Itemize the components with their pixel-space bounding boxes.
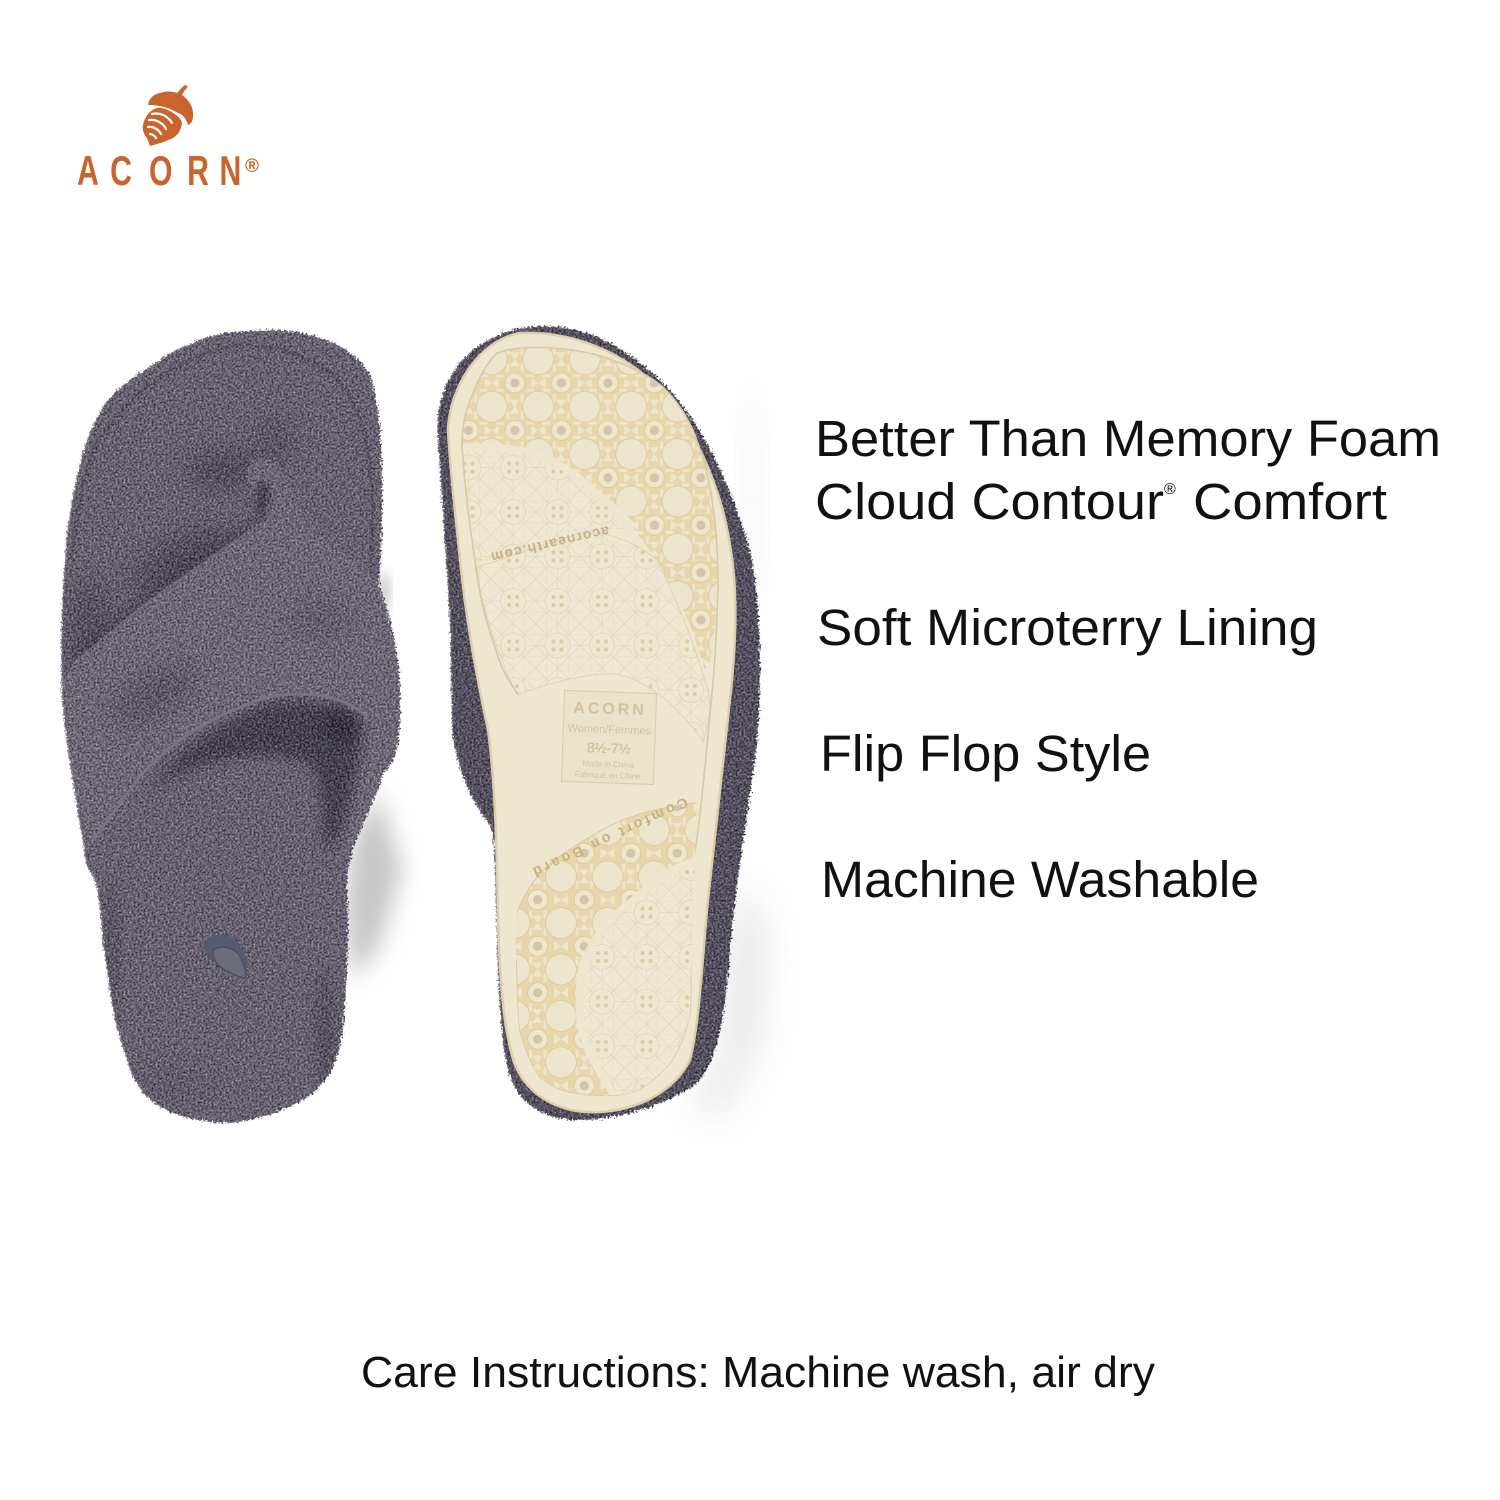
registered mark: ®: [245, 156, 259, 177]
toe tread: circles: [463, 348, 718, 670]
heel contour edge: [518, 803, 697, 910]
icon: acorn: [143, 85, 193, 146]
care instructions: Care Instructions: Machine wash, air dry: [361, 1348, 1155, 1397]
label gender: Women/Femmes: [567, 723, 652, 737]
label brand: ACORN: [573, 700, 647, 719]
slogan text on sole: Comfort on Board: [527, 793, 690, 881]
strap upper seam: [73, 522, 263, 663]
feature: cloud contour: ®: [1164, 481, 1176, 498]
feature: microterry: Soft Microterry Lining: [817, 599, 1318, 656]
feature: washable: Machine Washable: [821, 851, 1259, 908]
label size: 8½-7½: [587, 739, 631, 757]
strap: [58, 458, 402, 853]
sole rim shading: [448, 333, 735, 1112]
feature: memory foam: Better Than Memory Foam: [815, 410, 1441, 467]
website text on sole: acornearth.com: [489, 523, 611, 566]
post crease: [256, 481, 270, 509]
sole band: [476, 528, 705, 678]
heel tread: fine panel: [579, 860, 700, 1100]
strap shading: [116, 608, 336, 724]
heel tread: circles: [510, 800, 700, 1100]
toe area shading: [68, 418, 293, 670]
slipper footbed and strap: [58, 330, 402, 1123]
feature list: [815, 410, 1441, 908]
wordmark: ACORN: [77, 147, 241, 194]
strap edge stitching: [93, 694, 367, 840]
shadow: slippers: [345, 390, 765, 1120]
feature: cloud contour: [815, 473, 1387, 530]
slipper: top view: [58, 330, 402, 1123]
fur edge: [437, 326, 760, 1120]
inner contour line: [462, 347, 718, 1095]
opening shadow: [105, 702, 361, 1101]
fine tread band: [462, 447, 633, 527]
slipper: sole view: [437, 326, 760, 1120]
feature: cloud contour: Cloud Contour: [815, 473, 1164, 530]
feature: flip flop: Flip Flop Style: [820, 725, 1151, 782]
label origin: Made in China: [582, 759, 635, 770]
feature: cloud contour: Comfort: [1193, 473, 1387, 530]
toe stitch line: [72, 345, 372, 575]
fine tread: upper panel: [462, 447, 633, 558]
size label panel: [561, 690, 657, 785]
logo: Acorn: [77, 85, 259, 194]
icon: embossed acorn: [204, 935, 247, 978]
label origin french: Fabriqué en Chine: [575, 770, 641, 781]
fine tread: lower panel: [475, 533, 710, 742]
sole base: [448, 333, 735, 1112]
